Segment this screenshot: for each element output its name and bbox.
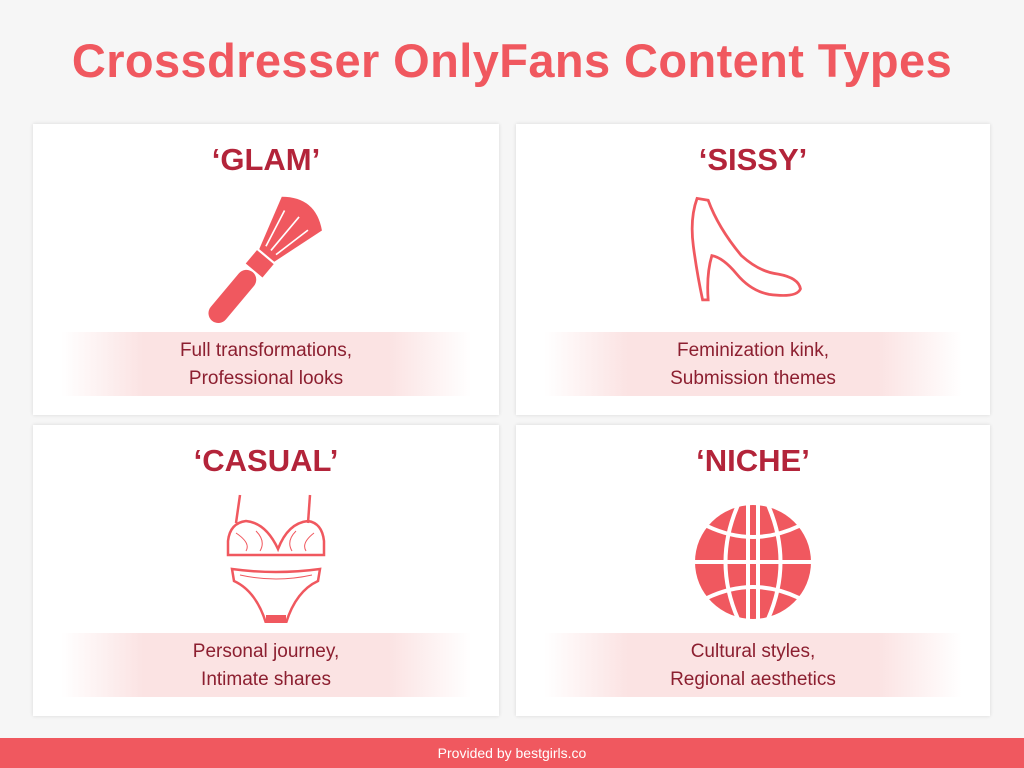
- icon: makeup brush: [208, 196, 322, 323]
- panel: sissy: [516, 124, 990, 415]
- caption: glam: [61, 332, 471, 396]
- heading: glam: ‘GLAM’: [212, 142, 320, 177]
- caption: casual: [61, 633, 471, 697]
- caption: casual: Intimate shares: [201, 669, 331, 690]
- icon: lingerie: [226, 494, 326, 623]
- panel: casual: [33, 425, 499, 716]
- title: Crossdresser OnlyFans Content Types: [72, 34, 952, 87]
- icon: high heel: [690, 196, 802, 302]
- caption: niche: Cultural styles,: [691, 641, 815, 662]
- caption: sissy: Submission themes: [670, 368, 836, 389]
- panel: niche: [516, 425, 990, 716]
- heading: niche: ‘NICHE’: [696, 443, 810, 478]
- heading: sissy: ‘SISSY’: [699, 142, 807, 177]
- footer: [0, 738, 1024, 768]
- caption: glam: Professional looks: [189, 368, 343, 389]
- panel: glam: [33, 124, 499, 415]
- icon: globe: [695, 505, 811, 619]
- caption: casual: Personal journey,: [193, 641, 339, 662]
- footer: Provided by bestgirls.co: [438, 745, 586, 761]
- caption: niche: [544, 633, 962, 697]
- caption: sissy: Feminization kink,: [677, 340, 829, 361]
- caption: glam: Full transformations,: [180, 340, 352, 361]
- caption: sissy: [544, 332, 962, 396]
- caption: niche: Regional aesthetics: [670, 669, 836, 690]
- heading: casual: ‘CASUAL’: [194, 443, 338, 478]
